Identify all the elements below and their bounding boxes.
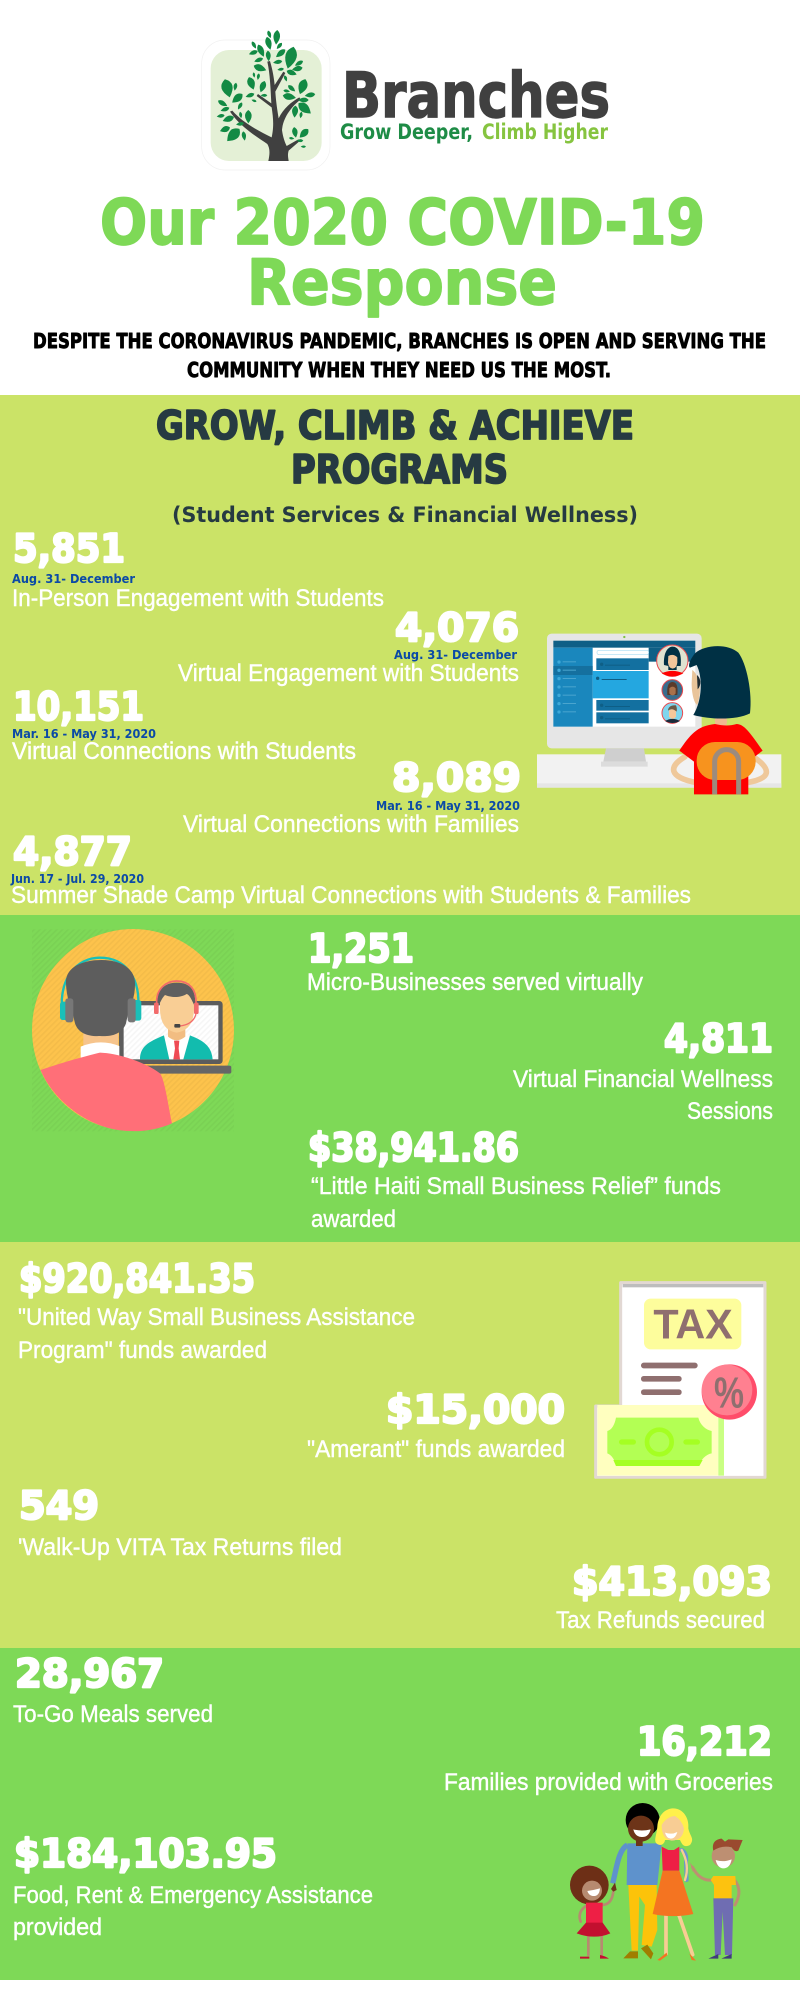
stat: 4,811: 4,811: [664, 1017, 773, 1062]
stat: 5,851: In-Person Engagement with Students: [12, 585, 384, 612]
stat: 10,151: [12, 685, 356, 765]
title: Our 2020 COVID-19: [100, 186, 705, 259]
stat: 10,151: 10,151: [13, 685, 144, 730]
stat: 10,151: Mar. 16 - May 31, 2020: [12, 726, 156, 741]
stat: $184,103.95: $184,103.95: [14, 1832, 277, 1877]
stat: $184,103.95: [13, 1832, 373, 1941]
logo icon: tree on rounded square: [202, 30, 330, 170]
logo tagline: Climb Higher: [482, 120, 609, 144]
stat: $38,941.86: awarded: [311, 1206, 396, 1233]
stat: 549: 'Walk-Up VITA Tax Returns filed: [18, 1534, 342, 1561]
stat: 5,851: 5,851: [13, 527, 125, 572]
illustration: student at computer: [537, 634, 781, 794]
stat: 16,212: Families provided with Groceries: [444, 1769, 773, 1796]
stat: 4,877: 4,877: [13, 830, 132, 875]
stat: 4,076: [178, 606, 519, 687]
logo wordmark: Branches: [342, 59, 610, 132]
stat: $15,000: $15,000: [386, 1388, 565, 1433]
illustration: tax document: %: [714, 1369, 744, 1417]
stat: 8,089: [183, 756, 521, 838]
stat: $413,093: [556, 1560, 772, 1634]
stat: 1,251: [307, 927, 643, 996]
panel: food and emergency assistance: [0, 1648, 800, 1980]
stat: 549: [18, 1484, 342, 1561]
stat: 5,851: Aug. 31- December: [12, 571, 136, 586]
stat: 4,076: 4,076: [395, 606, 519, 651]
stat: 16,212: 16,212: [637, 1720, 772, 1765]
stat: 1,251: 1,251: [308, 927, 414, 972]
stat: $38,941.86: “Little Haiti Small Business Relief” funds: [311, 1173, 721, 1200]
stat: 4,877: [10, 830, 691, 909]
stat: 4,811: Sessions: [687, 1098, 773, 1125]
stat: $15,000: "Amerant" funds awarded: [307, 1436, 565, 1463]
stat: $413,093: $413,093: [572, 1560, 772, 1605]
section heading: [156, 404, 634, 493]
stat: $184,103.95: provided: [13, 1914, 102, 1941]
title: Response: [247, 246, 557, 319]
illustration: tax document: TAX: [653, 1301, 733, 1347]
section subheading: (Student Services & Financial Wellness): [172, 503, 638, 528]
section heading: PROGRAMS: [291, 448, 508, 493]
stat: $920,841.35: "United Way Small Business Assistance: [18, 1304, 415, 1331]
stat: 4,811: [513, 1017, 773, 1125]
stat: 549: 549: [19, 1484, 99, 1529]
stat: 4,076: Aug. 31- December: [394, 647, 518, 662]
stat: $920,841.35: $920,841.35: [19, 1257, 255, 1302]
stat: 1,251: Micro-Businesses served virtually: [307, 969, 643, 996]
stat: $920,841.35: [18, 1257, 415, 1364]
section heading: GROW, CLIMB & ACHIEVE: [156, 404, 634, 449]
logo tagline: [340, 120, 609, 144]
logo: [202, 30, 610, 170]
stat: $38,941.86: $38,941.86: [308, 1126, 519, 1171]
title: [100, 186, 705, 319]
stat: 4,877: Summer Shade Camp Virtual Connections with Students & Families: [11, 882, 691, 909]
stat: 28,967: 28,967: [15, 1652, 164, 1697]
stat: 10,151: Virtual Connections with Students: [12, 738, 356, 765]
stat: $184,103.95: Food, Rent & Emergency Assistance: [13, 1882, 373, 1909]
stat: 28,967: To-Go Meals served: [13, 1701, 213, 1728]
intro text: COMMUNITY WHEN THEY NEED US THE MOST.: [187, 358, 611, 382]
stat: 8,089: Virtual Connections with Families: [183, 811, 519, 838]
stat: $413,093: Tax Refunds secured: [556, 1607, 765, 1634]
panel: relief funds and tax returns: [0, 1242, 800, 1648]
stat: 4,076: Virtual Engagement with Students: [178, 660, 519, 687]
illustration: tax document: [596, 1283, 765, 1477]
stat: 4,811: Virtual Financial Wellness: [513, 1066, 773, 1093]
panel: micro-business and financial wellness: [0, 915, 800, 1242]
logo tagline: Grow Deeper,: [340, 120, 473, 144]
stat: 4,877: Jun. 17 - Jul. 29, 2020: [10, 871, 144, 886]
illustration: video call with headset: [32, 929, 234, 1131]
illustration: family of four: [570, 1803, 743, 1961]
stat: $38,941.86: [308, 1126, 721, 1233]
stat: 16,212: [444, 1720, 773, 1796]
stat: $920,841.35: Program" funds awarded: [18, 1337, 267, 1364]
intro text: [33, 329, 766, 382]
stat: $15,000: [307, 1388, 565, 1463]
stat: 8,089: 8,089: [392, 756, 521, 801]
stat: 5,851: [12, 527, 384, 612]
panel: Grow, Climb and Achieve student services: [0, 395, 800, 915]
stat: 8,089: Mar. 16 - May 31, 2020: [376, 798, 520, 813]
stat: 28,967: [13, 1652, 213, 1728]
